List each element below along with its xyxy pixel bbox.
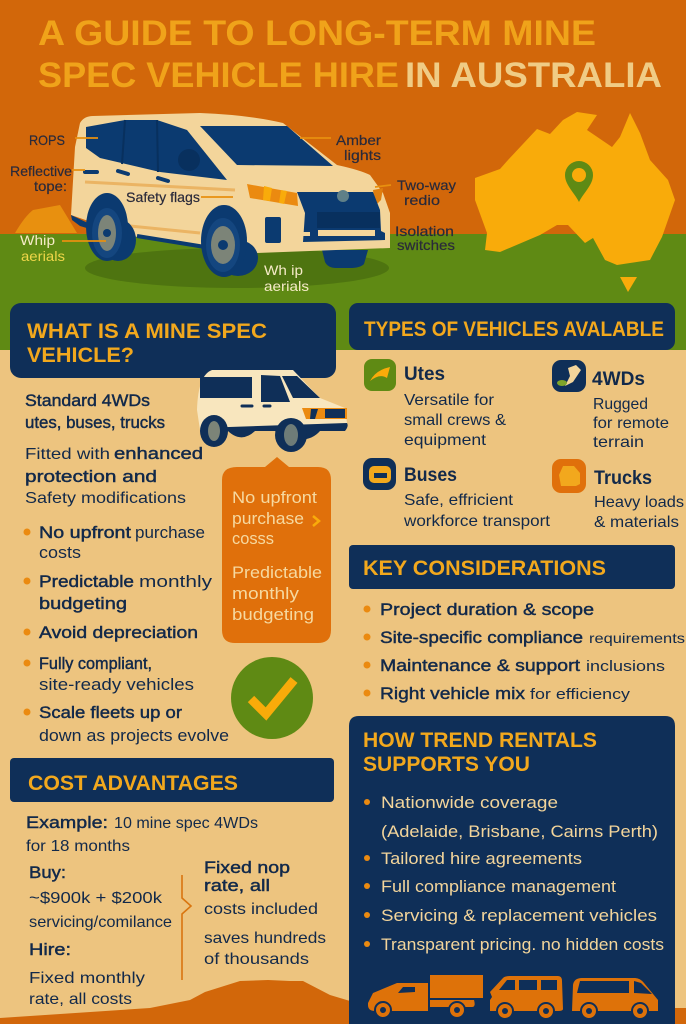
text block: buy vs hire	[29, 863, 172, 1008]
heading: what is a mine spec vehicle: WHAT IS A MINE SPEC	[27, 320, 267, 343]
vehicle type: 4WDs: 4WDs	[592, 369, 645, 390]
panel: key considerations	[349, 545, 685, 703]
benefits list: Fully compliant,	[39, 654, 152, 673]
text block: vehicle definition: Fitted with	[25, 446, 110, 463]
icon: front wheel	[201, 205, 258, 277]
small vehicle illustration	[197, 370, 348, 452]
heading: how trend rentals	[363, 729, 597, 776]
benefits list: down as projects evolve	[39, 726, 229, 745]
panel: how trend rentals supports you	[349, 716, 675, 1024]
text block: example	[26, 813, 258, 855]
vehicle type: trucks: & materials	[594, 514, 679, 531]
vehicle type: buses	[363, 458, 551, 530]
callout labels on vehicle: redio	[404, 192, 440, 208]
vehicle type: buses: workforce transport	[403, 513, 551, 530]
panel: cost advantages	[10, 758, 334, 1008]
title: A GUIDE TO LONG-TERM MINE	[38, 14, 596, 53]
icon: utes	[364, 359, 396, 391]
callout labels on vehicle: Amber	[336, 132, 381, 148]
vehicle type: trucks: Heavy loads	[594, 494, 684, 511]
vehicle type: utes	[364, 359, 506, 449]
vehicle type: utes: Utes	[404, 364, 445, 385]
text block: buy vs hire: servicing/comilance	[29, 914, 172, 931]
icon: location pin	[565, 161, 593, 202]
panel: types of vehicles	[349, 303, 684, 531]
callout labels on vehicle: ROPS	[29, 132, 65, 148]
benefits list: purchase	[135, 523, 205, 542]
considerations list: Project duration & scope	[380, 600, 594, 619]
icon: minibus	[572, 978, 658, 1019]
text block: buy vs hire: rate, all costs	[29, 991, 132, 1008]
mine spec vehicle illustration	[71, 113, 390, 288]
callout labels on vehicle: switches	[397, 237, 455, 253]
vehicle type: 4WDs: Rugged	[593, 396, 648, 413]
support list: Tailored hire agreements	[381, 849, 582, 868]
icon: trucks	[552, 459, 586, 493]
support list: Servicing & replacement vehicles	[381, 906, 657, 925]
text block: example: Example:	[26, 813, 108, 832]
text block: buy vs hire: Buy:	[29, 863, 66, 882]
callout labels on vehicle: Isolation	[395, 223, 454, 239]
title: SPEC VEHICLE HIRE	[38, 56, 399, 95]
vehicle type: buses: Safe, effricient	[404, 492, 514, 509]
text block: fixed rate savings: of thousands	[204, 951, 309, 968]
benefits list	[24, 523, 229, 745]
text block: buy vs hire: Hire:	[29, 940, 71, 959]
vehicle type: 4WDs	[552, 360, 669, 451]
text block: vehicle definition: protection and	[25, 467, 157, 486]
considerations list: Site-specific compliance	[380, 628, 583, 647]
heading: what is a mine spec vehicle	[10, 303, 336, 378]
text block: vehicle definition: Standard 4WDs	[25, 391, 150, 410]
callout: orange benefits: purchase	[232, 509, 304, 528]
text block: fixed rate savings	[204, 858, 326, 968]
considerations list: Maintenance & support	[380, 656, 580, 675]
callout labels on vehicle: Wh ip	[264, 262, 303, 278]
support list	[364, 793, 664, 954]
text block: example: for 18 months	[26, 838, 130, 855]
icon: 4WDs	[552, 360, 586, 392]
heading: types of vehicles	[349, 303, 675, 350]
callout labels on vehicle: Safety flags	[126, 189, 200, 205]
vehicle type: utes: small crews &	[404, 412, 506, 429]
text block: example: 10 mine spec 4WDs	[114, 815, 258, 832]
vehicle type: buses: Buses	[404, 465, 457, 486]
callout labels on vehicle: tope:	[34, 178, 67, 194]
vehicle type: utes: equipment	[404, 432, 487, 449]
heading: key considerations	[349, 545, 675, 589]
heading: what is a mine spec vehicle: VEHICLE?	[27, 344, 134, 367]
considerations list: requirements	[589, 630, 685, 646]
text block: vehicle definition: utes, buses, trucks	[25, 413, 165, 432]
text block: buy vs hire: Fixed monthly	[29, 970, 145, 987]
hero background	[0, 0, 686, 350]
map of Australia with pin	[475, 112, 675, 292]
icon: rear wheel	[86, 193, 136, 261]
callout labels on vehicle: Whip	[20, 232, 55, 248]
support list: Full compliance management	[381, 877, 616, 896]
icon: truck	[368, 975, 483, 1018]
callout: orange benefits: monthly	[232, 584, 300, 603]
benefits list: Predictable	[39, 572, 134, 591]
benefits list: budgeting	[39, 594, 127, 613]
heading: cost advantages: COST ADVANTAGES	[28, 772, 238, 795]
benefits list: Avoid depreciation	[39, 623, 198, 642]
vehicle type: trucks	[552, 459, 684, 531]
callout: orange benefits	[222, 457, 331, 643]
considerations list	[364, 600, 685, 703]
callout: orange benefits: Predictable	[232, 563, 322, 582]
callout labels on vehicle: Reflective	[10, 163, 72, 179]
title	[38, 14, 662, 95]
callout labels on vehicle: aerials	[21, 248, 65, 264]
vehicle type: 4WDs: terrain	[593, 434, 644, 451]
icon: van	[490, 976, 563, 1019]
text block: buy vs hire: ~$900k + $200k	[29, 890, 163, 907]
support list: Nationwide coverage	[381, 793, 558, 812]
text block: vehicle definition	[25, 391, 203, 507]
text block: fixed rate savings: rate, all	[204, 876, 270, 895]
heading: key considerations: KEY CONSIDERATIONS	[363, 557, 606, 580]
callout labels on vehicle	[10, 132, 456, 294]
callout: orange benefits: No upfront	[232, 488, 317, 507]
heading: types of vehicles: TYPES OF VEHICLES AVALABLE	[364, 318, 664, 341]
text block: fixed rate savings: costs included	[204, 901, 318, 918]
text block: vehicle definition: enhanced	[114, 444, 203, 463]
considerations list: inclusions	[586, 658, 665, 675]
heading: how trend rentals: SUPPORTS YOU	[363, 753, 530, 776]
title: IN AUSTRALIA	[405, 56, 662, 95]
panel: what is a mine spec vehicle	[10, 303, 348, 745]
text block: vehicle definition: Safety modifications	[25, 490, 186, 507]
benefits list: Scale fleets up or	[39, 703, 182, 722]
brace connector	[182, 875, 191, 980]
bottom terrain	[0, 980, 686, 1024]
support list: Transparent pricing. no hidden costs	[381, 935, 664, 954]
considerations list: for efficiency	[530, 686, 631, 703]
text block: fixed rate savings: saves hundreds	[204, 930, 326, 947]
icons: fleet of vehicles	[368, 975, 658, 1019]
vehicle type: utes: Versatile for	[404, 392, 495, 409]
heading: how trend rentals: HOW TREND RENTALS	[363, 729, 597, 752]
callout: orange benefits: budgeting	[232, 605, 314, 624]
icon: buses	[363, 458, 396, 490]
heading: cost advantages	[10, 758, 334, 802]
benefits list: costs	[39, 543, 81, 562]
benefits list: site-ready vehicles	[39, 675, 194, 694]
callout labels on vehicle: aerials	[264, 278, 309, 294]
considerations list: Right vehicle mix	[380, 684, 526, 703]
vehicle type: trucks: Trucks	[594, 468, 652, 489]
callout labels on vehicle: lights	[344, 147, 381, 163]
benefits list: monthly	[139, 572, 213, 591]
support list: (Adelaide, Brisbane, Cairns Perth)	[381, 822, 658, 841]
icon: green check mark	[231, 657, 313, 739]
text block: fixed rate savings: Fixed nop	[204, 858, 290, 877]
callout labels on vehicle: Two-way	[397, 177, 456, 193]
benefits list: No upfront	[39, 523, 131, 542]
callout: orange benefits: cosss	[232, 529, 274, 548]
vehicle type: 4WDs: for remote	[593, 415, 669, 432]
